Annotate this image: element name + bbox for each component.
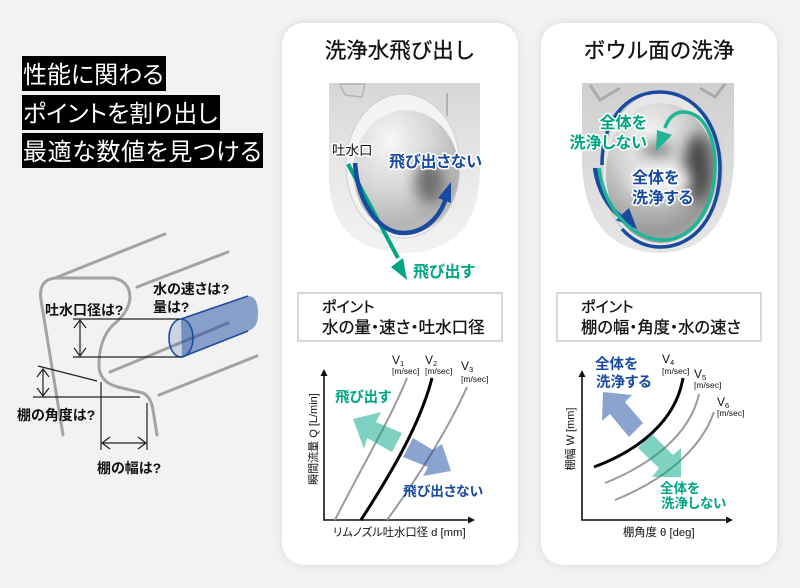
chart: flow rate vs nozzle diameter: 飛び出す — [335, 389, 391, 406]
chart: shelf width vs shelf angle: 6 — [725, 401, 729, 410]
arrow: partial surface — [638, 434, 681, 477]
callout: point, right — [557, 293, 761, 341]
chart: shelf width vs shelf angle: [m/sec] — [662, 366, 689, 376]
callout: point, left: 水の量・速さ・吐水口径 — [322, 318, 485, 337]
chart: shelf width vs shelf angle: 全体を — [595, 355, 638, 373]
diagram: rim cross-section: 棚の角度は? — [17, 407, 95, 423]
title — [22, 56, 263, 168]
chart: shelf width vs shelf angle: 4 — [670, 358, 674, 367]
illustration: toilet bowl, discharge: 飛び出す — [413, 263, 475, 281]
chart: flow rate vs nozzle diameter: V — [461, 359, 469, 373]
heading: water discharge: 洗浄水飛び出し — [325, 39, 475, 63]
heading: bowl surface cleaning: ボウル面の洗浄 — [584, 39, 734, 63]
blue arrow: water stays in — [355, 163, 451, 233]
chart: shelf width vs shelf angle — [563, 352, 744, 539]
chart: flow rate vs nozzle diameter: [m/sec] — [425, 366, 452, 376]
chart: flow rate vs nozzle diameter: V — [392, 353, 400, 367]
chart: shelf width vs shelf angle: 棚幅 W [mm] — [563, 408, 577, 470]
callout: point, left: ポイント — [322, 299, 375, 316]
chart: shelf width vs shelf angle: 洗浄しない — [661, 496, 726, 511]
illustration: toilet bowl, bowl surface — [569, 83, 734, 253]
chart: shelf width vs shelf angle: V — [662, 352, 670, 366]
water jet cylinder — [169, 296, 258, 357]
title: 性能に関わる — [23, 62, 164, 89]
chart: shelf width vs shelf angle: [m/sec] — [694, 380, 721, 390]
chart: flow rate vs nozzle diameter: 1 — [400, 359, 404, 368]
illustration: toilet bowl, discharge — [329, 83, 482, 281]
illustration: toilet bowl, bowl surface: 洗浄しない — [569, 133, 647, 152]
chart: flow rate vs nozzle diameter: V — [425, 353, 433, 367]
diagram: rim cross-section: 吐水口径は? — [45, 302, 123, 318]
panel: right card background — [541, 23, 777, 565]
illustration: toilet bowl, discharge: 飛び出さない — [389, 153, 482, 171]
title: ポイントを割り出し — [23, 101, 217, 128]
chart: flow rate vs nozzle diameter: [m/sec] — [392, 366, 419, 376]
chart: flow rate vs nozzle diameter: 3 — [469, 365, 473, 374]
chart: flow rate vs nozzle diameter: リムノズル吐水口径 d [mm] — [333, 525, 466, 539]
panel: left card background — [282, 23, 518, 565]
chart: flow rate vs nozzle diameter: [m/sec] — [461, 374, 488, 384]
chart: flow rate vs nozzle diameter: 瞬間流量 Q [L/min] — [307, 393, 320, 485]
diagram: rim cross-section — [17, 234, 258, 476]
arrow: stays in — [403, 438, 451, 476]
green ring arrow: partial surface — [599, 112, 715, 240]
chart: shelf width vs shelf angle: [m/sec] — [717, 408, 744, 418]
chart: shelf width vs shelf angle: V — [717, 395, 725, 409]
title: 最適な数値を見つける — [23, 139, 262, 166]
chart: flow rate vs nozzle diameter — [307, 353, 488, 539]
chart: shelf width vs shelf angle: V — [694, 367, 702, 381]
blue ring arrow: whole surface — [595, 92, 720, 247]
diagram: rim cross-section: 水の速さは? — [153, 281, 229, 297]
illustration: toilet bowl, discharge: 吐水口 — [332, 143, 372, 158]
diagram: rim cross-section: 棚の幅は? — [97, 460, 161, 476]
illustration: toilet bowl, bowl surface: 洗浄する — [632, 188, 693, 207]
illustration: toilet bowl, bowl surface: 全体を — [600, 113, 647, 132]
illustration: toilet bowl, bowl surface: 全体を — [632, 168, 679, 187]
chart: flow rate vs nozzle diameter: 2 — [433, 359, 437, 368]
chart: shelf width vs shelf angle: 洗浄する — [596, 373, 651, 391]
arrow: flies out — [353, 412, 402, 452]
callout: point, right: ポイント — [581, 299, 634, 316]
arrow: whole surface — [602, 392, 643, 437]
chart: shelf width vs shelf angle: 棚角度 θ [deg] — [623, 525, 695, 539]
chart: flow rate vs nozzle diameter: 飛び出さない — [403, 484, 483, 499]
callout: point, right: 棚の幅・角度・水の速さ — [581, 319, 741, 337]
dimension lines — [33, 319, 182, 450]
chart: shelf width vs shelf angle: 全体を — [660, 480, 700, 496]
chart: shelf width vs shelf angle: 5 — [702, 373, 706, 382]
callout: point, left — [298, 293, 502, 341]
diagram: rim cross-section: 量は? — [153, 299, 189, 315]
green arrow: water flies out — [348, 164, 407, 280]
